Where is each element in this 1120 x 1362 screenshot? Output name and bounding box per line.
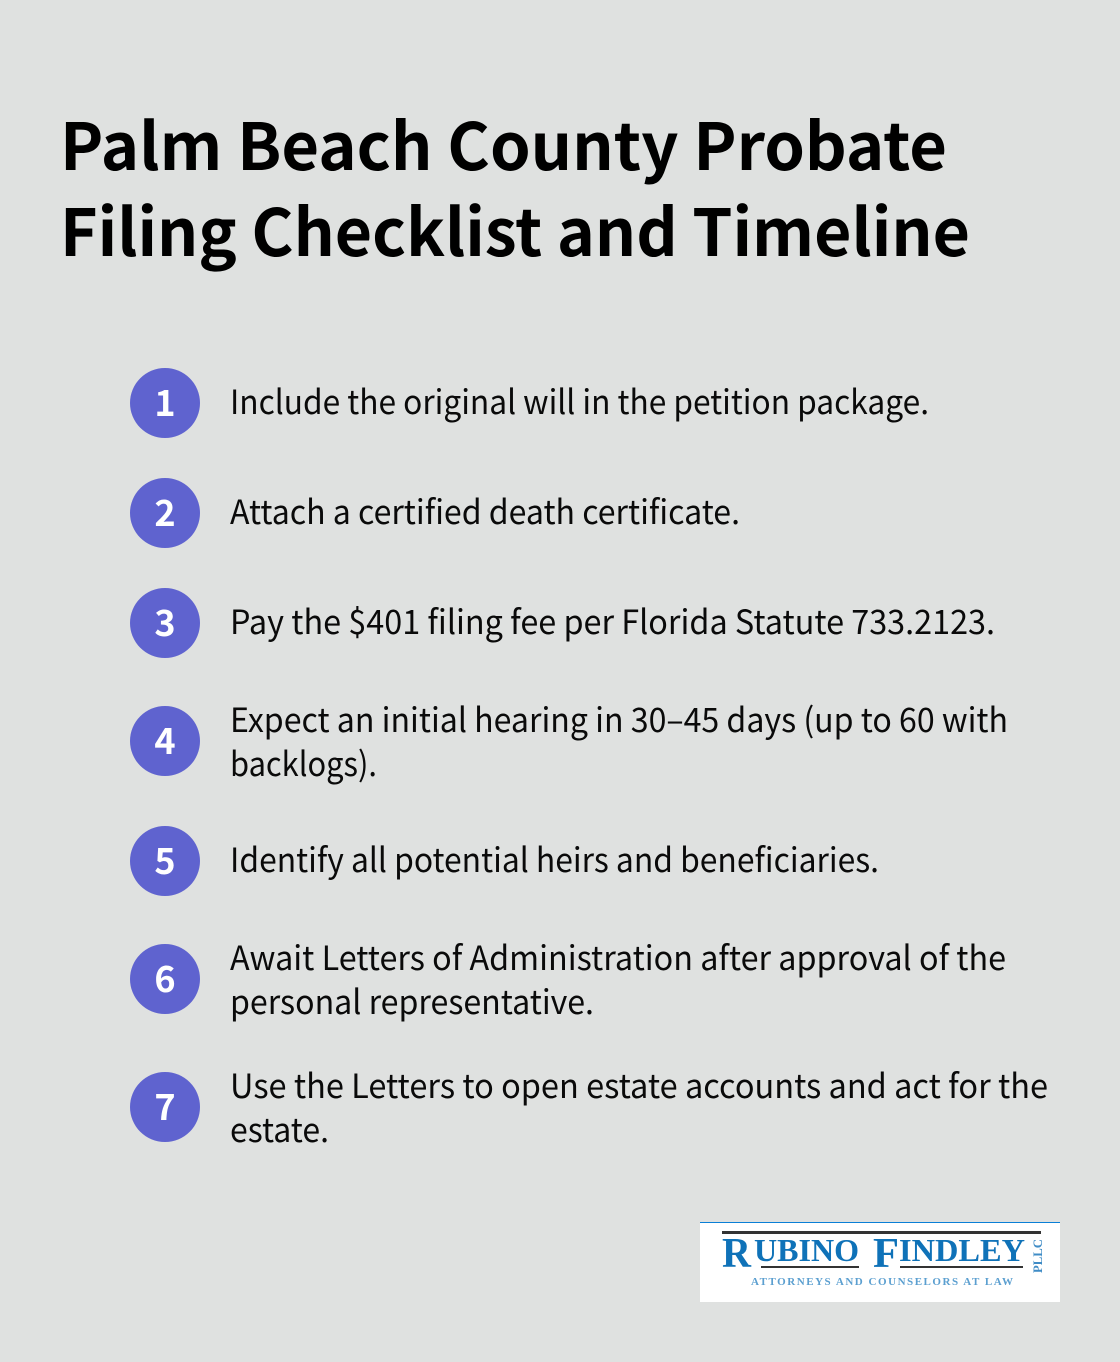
step 7: estate. <box>230 1103 329 1152</box>
step 2: 2 <box>154 485 176 537</box>
logo: Rubino Findley: UBINO <box>754 1232 859 1268</box>
checklist steps <box>130 368 1048 1152</box>
step 3 <box>130 588 995 658</box>
logo: Rubino Findley: INDLEY <box>899 1232 1025 1268</box>
logo: Rubino Findley: ATTORNEYS AND COUNSELORS AT LAW <box>751 1276 1013 1288</box>
step 2 <box>130 478 740 548</box>
title: Filing Checklist and Timeline <box>60 181 970 275</box>
step 7 <box>130 1059 1048 1152</box>
step 4 <box>130 693 1008 786</box>
step 6: personal representative. <box>230 975 594 1024</box>
step 7: 7 <box>154 1079 176 1131</box>
step 2: Attach a certified death certificate. <box>230 485 740 534</box>
step 6 <box>130 931 1006 1024</box>
step 1: Include the original will in the petition package. <box>230 375 929 424</box>
title <box>60 95 970 275</box>
step 5: 5 <box>154 833 176 885</box>
step 5 <box>130 826 879 896</box>
logo: Rubino Findley: F <box>873 1231 899 1277</box>
step 4: backlogs). <box>230 737 377 786</box>
logo: Rubino Findley <box>700 1222 1060 1302</box>
step 7: Use the Letters to open estate accounts and act for the <box>230 1059 1048 1108</box>
step 4: 4 <box>154 713 176 765</box>
step 3: 3 <box>154 595 176 647</box>
step 3: Pay the $401 filing fee per Florida Statute 733.2123. <box>230 595 995 644</box>
step 6: Await Letters of Administration after approval of the <box>230 931 1006 980</box>
step 4: Expect an initial hearing in 30–45 days (up to 60 with <box>230 693 1008 742</box>
step 6: 6 <box>154 951 176 1003</box>
logo: Rubino Findley: R <box>722 1231 752 1277</box>
logo: Rubino Findley: PLLC <box>1030 1239 1045 1273</box>
step 5: Identify all potential heirs and beneficiaries. <box>230 833 879 882</box>
step 1: 1 <box>154 375 176 427</box>
step 1 <box>130 368 929 438</box>
title: Palm Beach County Probate <box>60 95 947 189</box>
